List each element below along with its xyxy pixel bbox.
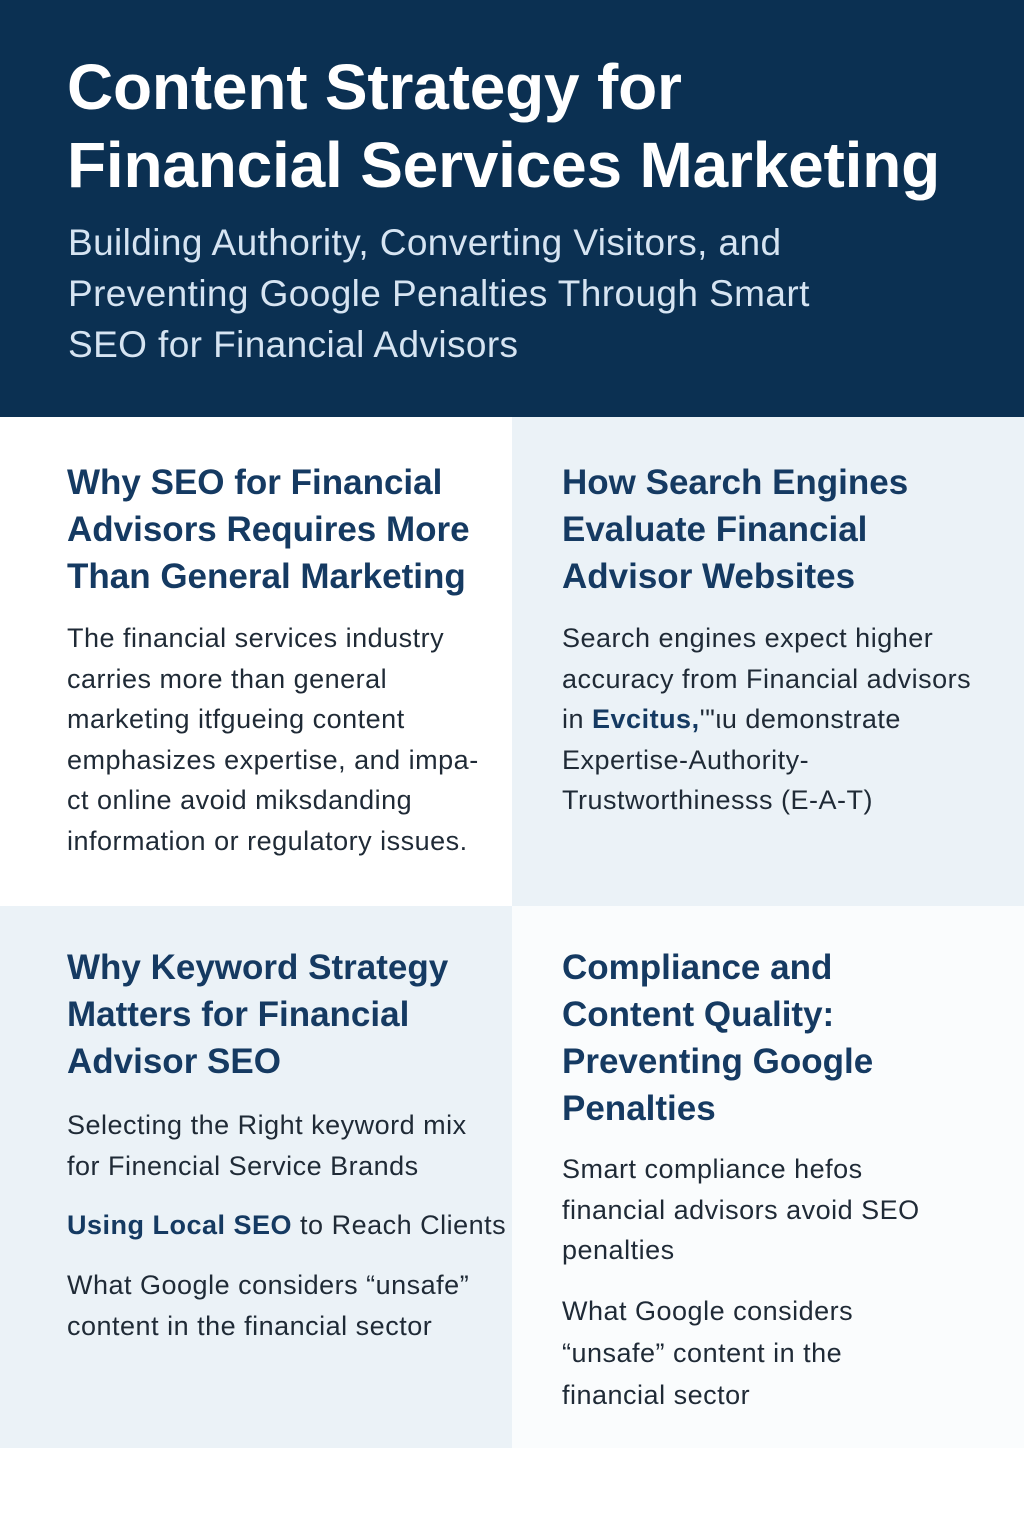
body text: for Finencial Service Brands bbox=[67, 1150, 419, 1180]
body text bbox=[67, 623, 479, 856]
subtitle bbox=[68, 222, 810, 365]
unsafe content: What Google considers bbox=[562, 1296, 853, 1326]
heading: Content Quality: bbox=[562, 995, 834, 1034]
heading bbox=[562, 948, 873, 1128]
body text bbox=[67, 1110, 467, 1180]
unsafe content: “unsafe” content in the bbox=[562, 1338, 842, 1368]
heading: Matters for Financial bbox=[67, 995, 409, 1034]
body text: Trustworthinesss (E-A-T) bbox=[562, 785, 873, 815]
subtitle: Preventing Google Penalties Through Smart bbox=[68, 273, 810, 314]
heading bbox=[67, 463, 470, 596]
heading: Advisors Requires More bbox=[67, 510, 470, 549]
panel: why SEO bbox=[0, 417, 512, 906]
unsafe content bbox=[562, 1296, 853, 1410]
body text bbox=[562, 623, 971, 815]
body text bbox=[562, 1154, 920, 1265]
title: Financial Services Marketing bbox=[67, 129, 940, 201]
header bbox=[0, 0, 1024, 417]
heading: Evaluate Financial bbox=[562, 510, 867, 549]
local SEO line: Using Local SEO to Reach Clients bbox=[67, 1210, 506, 1240]
body text: Selecting the Right keyword mix bbox=[67, 1110, 467, 1140]
body text: emphasizes expertise, and impa- bbox=[67, 744, 479, 774]
body text: carries more than general bbox=[67, 664, 387, 694]
unsafe content: financial sector bbox=[562, 1380, 750, 1410]
heading: Advisor Websites bbox=[562, 557, 855, 596]
heading: Compliance and bbox=[562, 948, 832, 987]
body text: ct online avoid miksdanding bbox=[67, 785, 412, 815]
body text: Expertise-Authority- bbox=[562, 744, 809, 774]
unsafe content bbox=[67, 1270, 469, 1340]
heading: How Search Engines bbox=[562, 463, 908, 502]
subtitle: SEO for Financial Advisors bbox=[68, 324, 518, 365]
unsafe content: What Google considers “unsafe” bbox=[67, 1270, 469, 1300]
heading: Advisor SEO bbox=[67, 1042, 281, 1081]
body text: The financial services industry bbox=[67, 623, 444, 653]
body text: Smart compliance hefos bbox=[562, 1154, 863, 1184]
panel: keyword strategy bbox=[0, 906, 512, 1448]
heading: Than General Marketing bbox=[67, 557, 466, 596]
heading bbox=[67, 948, 448, 1081]
unsafe content: content in the financial sector bbox=[67, 1310, 432, 1340]
body text: penalties bbox=[562, 1235, 675, 1265]
body text: Search engines expect higher bbox=[562, 623, 933, 653]
body text: accuracy from Financial advisors bbox=[562, 664, 971, 694]
panel: compliance bbox=[512, 906, 1024, 1448]
heading: Penalties bbox=[562, 1089, 716, 1128]
panel: search engines bbox=[512, 417, 1024, 906]
body text: in Evcitus,'"ιu demonstrate bbox=[562, 704, 901, 734]
heading: Preventing Google bbox=[562, 1042, 873, 1081]
body text: financial advisors avoid SEO bbox=[562, 1194, 920, 1224]
heading bbox=[562, 463, 908, 596]
body text: information or regulatory issues. bbox=[67, 826, 468, 856]
subtitle: Building Authority, Converting Visitors, and bbox=[68, 222, 781, 263]
heading: Why SEO for Financial bbox=[67, 463, 442, 502]
body text: marketing itfgueing content bbox=[67, 704, 405, 734]
title: Content Strategy for bbox=[67, 51, 682, 123]
heading: Why Keyword Strategy bbox=[67, 948, 448, 987]
title bbox=[67, 51, 940, 201]
